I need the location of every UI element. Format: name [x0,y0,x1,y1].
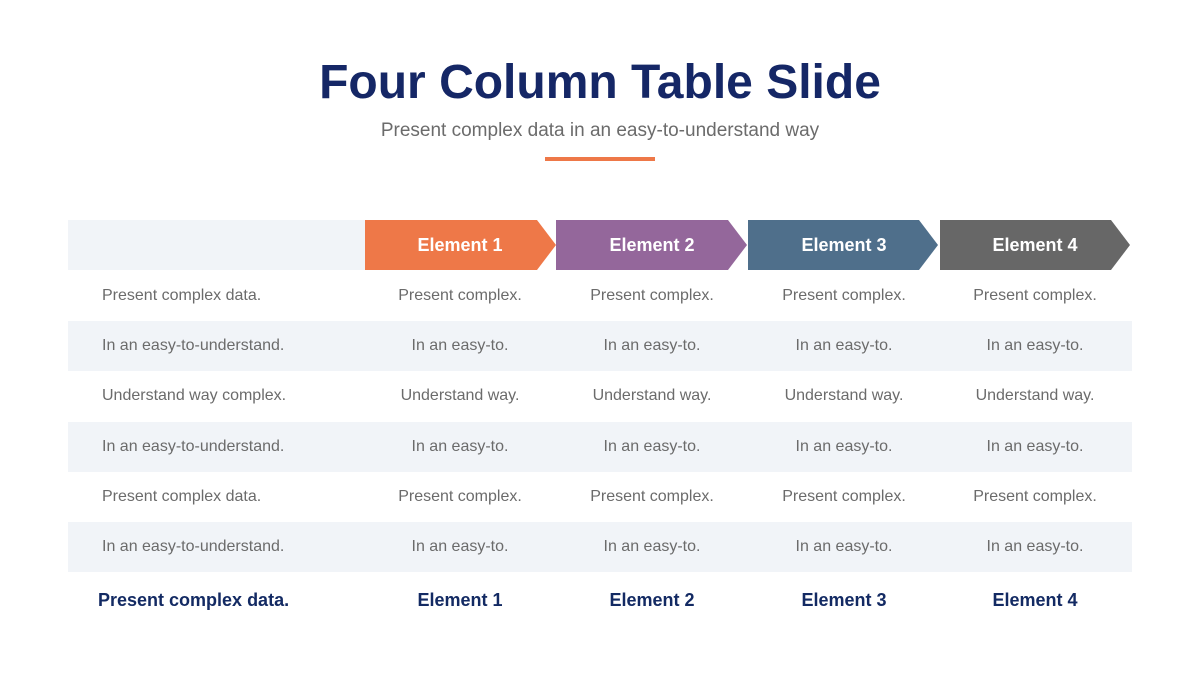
row 3: Understand way complex. [102,387,286,404]
row 3: Understand way. [593,387,711,404]
header chevrons: Element 3 [801,235,887,255]
row 6 [68,522,1132,572]
row 2: In an easy-to. [987,337,1083,354]
row 4: In an easy-to. [412,438,508,455]
row 4: In an easy-to. [604,438,700,455]
footer row [98,590,1078,610]
footer row: Element 1 [417,590,503,610]
row 4: In an easy-to. [796,438,892,455]
row 6: In an easy-to. [604,538,700,555]
header chevrons: Element 4 [992,235,1078,255]
row 4 [68,422,1132,472]
row 5: Present complex. [973,488,1097,505]
row 6: In an easy-to. [412,538,508,555]
footer row: Element 4 [992,590,1078,610]
row 2: In an easy-to. [796,337,892,354]
row 6: In an easy-to. [796,538,892,555]
row 3 [102,387,1094,404]
row 5: Present complex data. [102,488,261,505]
row 2: In an easy-to. [412,337,508,354]
row 5: Present complex. [782,488,906,505]
row 1: Present complex. [782,287,906,304]
footer row: Element 2 [609,590,695,610]
row 2: In an easy-to. [604,337,700,354]
header chevrons [365,220,1130,270]
row 3: Understand way. [976,387,1094,404]
row 4: In an easy-to. [987,438,1083,455]
row 5 [102,488,1097,505]
row 3: Understand way. [785,387,903,404]
footer row: Present complex data. [98,590,289,610]
footer row: Element 3 [801,590,887,610]
row 1: Present complex data. [102,287,261,304]
row 4: In an easy-to-understand. [102,438,284,455]
row 1 [102,287,1097,304]
header chevrons: Element 2 [609,235,695,255]
row 3: Understand way. [401,387,519,404]
row 5: Present complex. [398,488,522,505]
table header [68,220,1130,270]
subtitle: Present complex data in an easy-to-understand way [381,120,819,141]
row 1: Present complex. [398,287,522,304]
row 1: Present complex. [973,287,1097,304]
title: Four Column Table Slide [319,56,881,109]
row 6: In an easy-to. [987,538,1083,555]
row 2: In an easy-to-understand. [102,337,284,354]
accent underline [545,157,655,161]
header chevrons: Element 1 [417,235,503,255]
row 1: Present complex. [590,287,714,304]
row 2 [68,321,1132,371]
row 5: Present complex. [590,488,714,505]
row 6: In an easy-to-understand. [102,538,284,555]
